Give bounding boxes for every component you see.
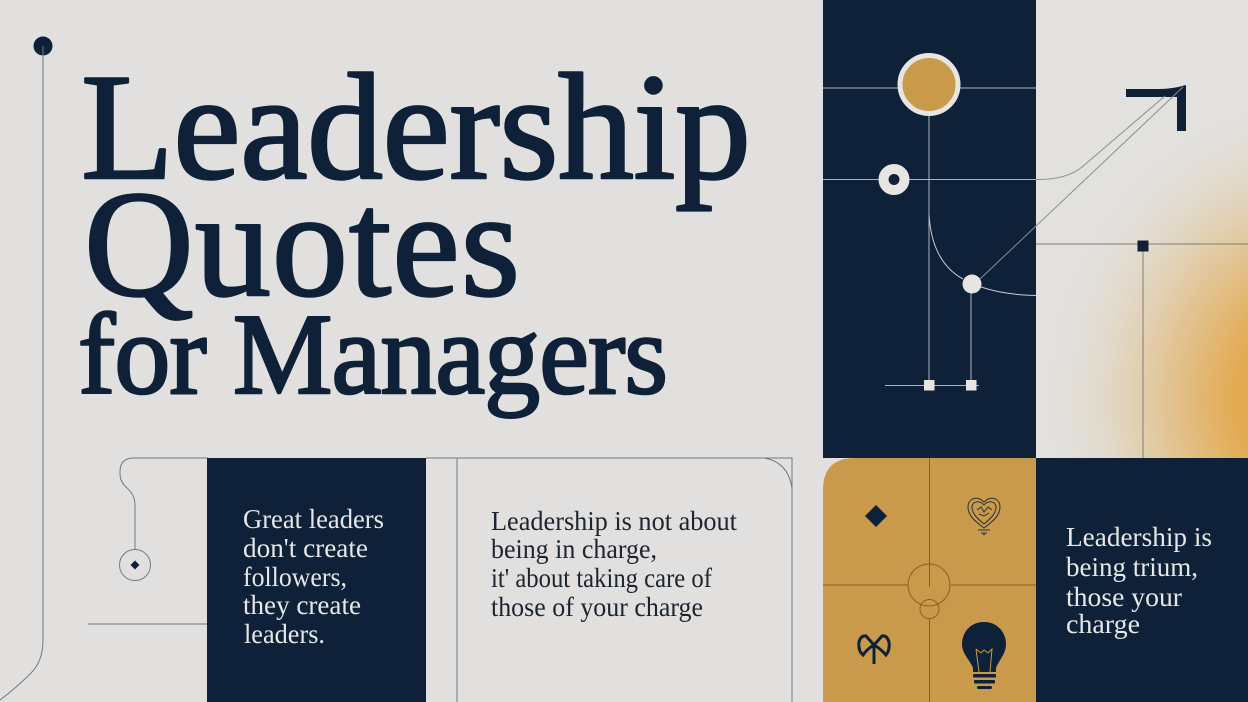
quote: being in charge: it' about taking care of (491, 563, 712, 593)
quote: leadership is (1066, 522, 1212, 639)
quote: leadership is: being trium, (1066, 552, 1198, 582)
quote: great leaders (243, 504, 384, 649)
panel: not about being in charge quote (426, 458, 792, 702)
quote: great leaders: they create (243, 590, 361, 620)
quote: being in charge (491, 506, 737, 622)
white node (962, 274, 982, 294)
left margin timeline (0, 36, 52, 700)
icon: ribbon figure (859, 636, 889, 664)
icon: heart bulb (968, 498, 1000, 535)
horizontal and vertical guide lines (823, 88, 1036, 386)
title (78, 43, 751, 418)
title: for Managers (78, 291, 668, 418)
panel: navy diagram (823, 0, 1036, 458)
panel: being trium quote (1036, 458, 1248, 702)
growth arrow (980, 85, 1186, 279)
quote: leadership is: Leadership is (1066, 522, 1212, 552)
title: Leadership (81, 43, 751, 211)
ring node (884, 169, 904, 190)
quote: being in charge: being in charge, (491, 534, 657, 564)
grid lines and centre circles (823, 458, 1036, 702)
large gold circle (900, 56, 958, 114)
quote: great leaders: followers, (243, 562, 347, 592)
panel: gold icon grid (823, 458, 1036, 702)
panel: great leaders quote (207, 458, 426, 702)
quote: leadership is: charge (1066, 609, 1140, 639)
quote: leadership is: those your (1066, 582, 1182, 612)
panel: gradient corner (1077, 145, 1248, 458)
title: Quotes (84, 160, 520, 328)
curved guides (929, 215, 1036, 296)
quote: being in charge: those of your charge (491, 592, 703, 622)
quote: great leaders: Great leaders (243, 504, 384, 534)
connector with target marker (88, 458, 208, 624)
icon: diamond (865, 505, 887, 527)
quote: great leaders: leaders. (244, 619, 325, 649)
quote: being in charge: Leadership is not about (491, 506, 737, 536)
icon: light bulb (962, 622, 1006, 689)
square nodes (924, 380, 976, 390)
quote: great leaders: don't create (243, 533, 368, 563)
crosshair with square marker (1036, 240, 1248, 458)
